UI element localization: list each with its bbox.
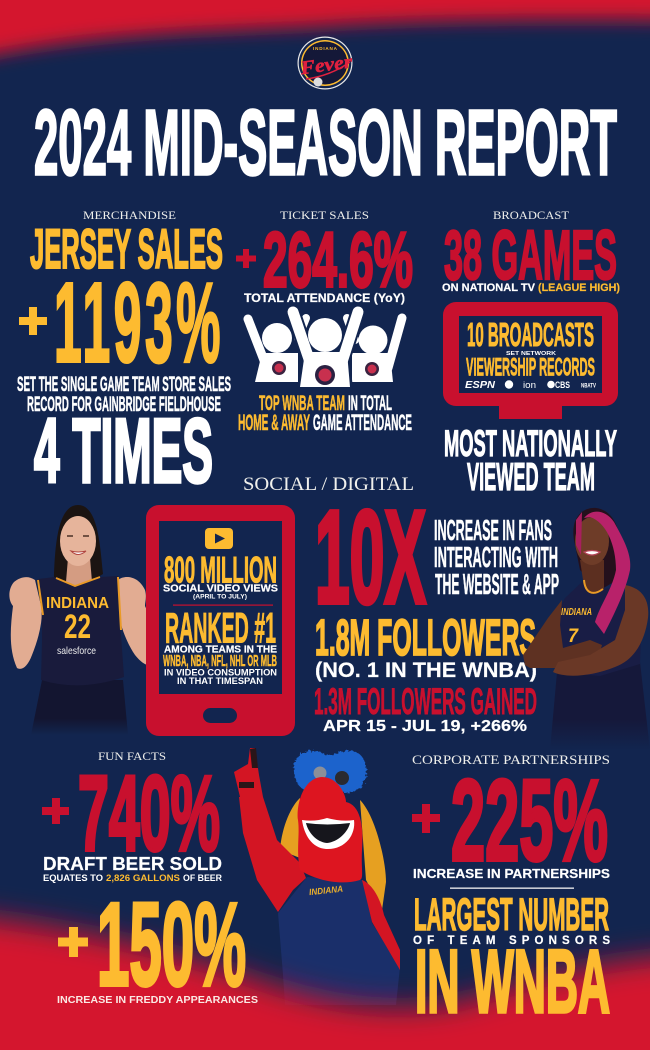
panel: social stats: 10X xyxy=(315,484,426,630)
eyes xyxy=(314,766,349,785)
heading: broadcast: BROADCAST xyxy=(493,208,570,222)
face xyxy=(60,516,96,566)
logo: Indiana Fever: Fever xyxy=(298,51,354,80)
jersey text xyxy=(561,607,592,647)
followers rank: (NO. 1 IN THE WNBA) xyxy=(315,659,537,682)
infographic canvas: JERSEY SALES xyxy=(30,217,223,280)
attendance caption: TOP WNBA TEAM xyxy=(259,392,345,415)
national tv label xyxy=(442,282,620,294)
icon: crowd of fans xyxy=(248,312,402,389)
arms xyxy=(9,577,42,669)
jersey text xyxy=(46,595,109,657)
neck xyxy=(66,558,92,590)
icon: smartphone xyxy=(146,505,295,736)
heading: merchandise: MERCHANDISE xyxy=(83,208,176,222)
followers date range: APR 15 - JUL 19, +266% xyxy=(323,718,527,735)
national tv label: (LEAGUE HIGH) xyxy=(538,282,620,294)
video views stat: SOCIAL VIDEO VIEWS xyxy=(163,584,278,594)
icon: television xyxy=(443,302,618,419)
heading: social / digital: SOCIAL / DIGITAL xyxy=(243,474,414,495)
infographic canvas: GAME ATTENDANCE xyxy=(313,410,412,435)
appearances plus sign xyxy=(58,927,88,957)
hand xyxy=(234,748,263,797)
heading: corporate partnerships: CORPORATE PARTNERSHIPS xyxy=(412,753,610,767)
attendance figure: 264.6% xyxy=(263,216,413,304)
network logos: ESPN xyxy=(465,380,496,391)
jersey sales plus sign xyxy=(19,307,47,335)
network logos: ion xyxy=(523,380,536,391)
panel: ticket sales xyxy=(236,208,413,435)
4 times figure: 4 TIMES xyxy=(34,401,213,502)
icon: smartphone: RANKED #1 xyxy=(165,604,276,652)
team sponsors label: OF TEAM SPONSORS xyxy=(413,935,610,947)
mascot: Freddy xyxy=(234,748,400,1005)
infographic canvas: SET THE SINGLE GAME TEAM STORE SALES xyxy=(17,373,231,396)
jersey text: salesforce xyxy=(57,645,96,657)
video views stat: (APRIL TO JULY) xyxy=(193,594,247,600)
video views stat xyxy=(163,550,278,600)
wings xyxy=(280,798,386,910)
crossed arms xyxy=(523,600,602,668)
icon: smartphone: WNBA, NBA, NFL, NHL OR MLB xyxy=(163,653,277,670)
ticket plus sign xyxy=(236,249,256,268)
network logos: CBS xyxy=(555,380,570,391)
heading: fun facts: FUN FACTS xyxy=(98,749,166,763)
infographic canvas: 1193% xyxy=(54,260,224,386)
red head xyxy=(298,777,362,882)
beer label: DRAFT BEER SOLD xyxy=(43,854,222,874)
player: number 22 xyxy=(9,505,157,735)
pointing arm xyxy=(239,797,306,912)
logo: Indiana Fever: INDIANA xyxy=(313,46,338,51)
logo: Indiana Fever xyxy=(298,36,354,90)
attendance label: TOTAL ATTENDANCE (YoY) xyxy=(244,293,405,305)
icon: video play button xyxy=(205,528,233,549)
panel: broadcast xyxy=(442,208,620,499)
tv screen text: SET NETWORK xyxy=(506,351,557,357)
fan interaction text xyxy=(434,515,559,601)
hair xyxy=(54,505,103,582)
jersey text: INDIANA xyxy=(561,607,592,618)
video views stat: 800 MILLION xyxy=(164,550,277,590)
pink braids xyxy=(576,512,630,634)
beer figure: 740% xyxy=(78,753,220,873)
mouth xyxy=(302,818,354,849)
heading: ticket sales: TICKET SALES xyxy=(280,208,369,222)
beer detail: EQUATES TO xyxy=(43,873,103,884)
ranking stat: IN THAT TIMESPAN xyxy=(177,676,263,687)
jersey text: 7 xyxy=(568,626,579,647)
store record text xyxy=(17,373,231,416)
ranking stat: AMONG TEAMS IN THE xyxy=(164,644,277,656)
panel: social stats xyxy=(314,484,559,735)
appearances label: INCREASE IN FREDDY APPEARANCES xyxy=(57,994,258,1006)
player: number 7 xyxy=(523,508,650,750)
national tv label: ON NATIONAL TV xyxy=(442,282,536,294)
attendance caption xyxy=(238,392,412,435)
attendance caption: HOME & AWAY xyxy=(238,410,310,435)
jersey text: INDIANA xyxy=(46,595,109,612)
panel: corporate partnerships xyxy=(412,753,610,1031)
attendance caption: IN TOTAL xyxy=(348,392,392,415)
beer detail xyxy=(43,873,222,884)
panel: merchandise xyxy=(17,208,231,502)
most viewed team text xyxy=(444,422,617,499)
ranking stat: IN VIDEO CONSUMPTION xyxy=(164,668,277,678)
blue head fur xyxy=(294,751,366,793)
shorts xyxy=(550,662,650,750)
infographic canvas: RECORD FOR GAINBRIDGE FIELDHOUSE xyxy=(27,393,221,416)
network logos xyxy=(465,380,596,391)
beer detail: OF BEER xyxy=(183,873,222,884)
ranking stat xyxy=(163,604,277,687)
partnerships label: INCREASE IN PARTNERSHIPS xyxy=(413,866,610,881)
tv screen text xyxy=(466,316,595,382)
partnerships plus sign xyxy=(412,804,440,833)
uniform text: INDIANA xyxy=(309,884,343,897)
back hair xyxy=(573,508,626,590)
jersey text: 22 xyxy=(64,608,91,646)
neck xyxy=(580,560,604,596)
panel: fun facts: 150% xyxy=(97,879,246,1011)
jersey xyxy=(38,576,124,685)
panel: fun facts xyxy=(42,749,258,1011)
red top glow xyxy=(0,0,650,62)
face xyxy=(575,517,609,565)
beer detail: 2,826 GALLONS xyxy=(106,873,180,884)
red bottom glow xyxy=(0,915,650,1050)
right side sleeve xyxy=(362,880,400,970)
jersey xyxy=(557,580,642,676)
network logos: NBATV xyxy=(581,382,596,390)
beer plus sign xyxy=(42,798,69,824)
shorts xyxy=(31,680,128,735)
uniform xyxy=(278,877,400,1005)
